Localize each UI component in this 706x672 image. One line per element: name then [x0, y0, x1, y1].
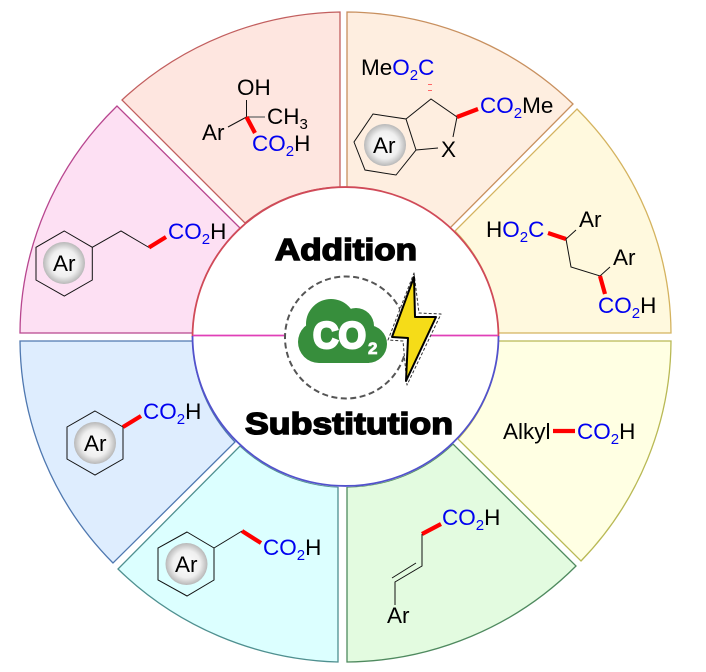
- molecule: diaryl diacid: Ar: [579, 207, 602, 232]
- molecule: benzoic acid: [67, 399, 201, 475]
- molecule: alkyl carboxylic acid: Alkyl: [503, 419, 551, 444]
- molecule: alpha-hydroxy acid: OH: [237, 75, 271, 100]
- molecule: fused ring diester: X: [441, 137, 456, 162]
- molecule: benzoic acid: 2: [177, 411, 185, 428]
- molecule: alpha-hydroxy acid: CO: [252, 131, 286, 156]
- molecule: benzoic acid: CO: [143, 399, 177, 424]
- panel: addition, diaryl diacid (yellow): [455, 109, 671, 333]
- panel: addition, dihydrobenzofuran diester (orange): [347, 12, 573, 228]
- molecule: diaryl diacid: 2: [520, 229, 528, 246]
- icon: CO2 cloud: [298, 299, 387, 363]
- molecule: fused ring diester: 2: [410, 67, 418, 84]
- molecule: fused ring diester: Me: [522, 93, 553, 118]
- heading: Addition: Addition: [275, 232, 417, 267]
- panel: addition, alpha-hydroxy acid (salmon): [122, 12, 340, 223]
- molecule: arylacetic acid: CO: [263, 535, 297, 560]
- molecule: benzoic acid: H: [185, 399, 201, 424]
- molecule: alpha-hydroxy acid: 3: [300, 116, 308, 133]
- molecule: fused ring diester: [354, 55, 553, 175]
- molecule: fused ring diester: C: [418, 55, 434, 80]
- molecule: arylacetic acid: 2: [297, 547, 305, 564]
- molecule: diaryl diacid: [486, 207, 656, 322]
- molecule: benzoic acid: Ar: [84, 431, 107, 456]
- icon: CO2 cloud: CO: [313, 315, 366, 356]
- molecule: arylpropanoic acid: 2: [202, 231, 210, 248]
- molecule: alpha-hydroxy acid: Ar: [202, 120, 225, 145]
- molecule: arylpropanoic acid: Ar: [53, 251, 76, 276]
- molecule: diaryl diacid: C: [528, 217, 544, 242]
- molecule: alpha-hydroxy acid: H: [294, 131, 310, 156]
- molecule: fused ring diester: CO: [480, 93, 514, 118]
- molecule: styrylacetic acid: [387, 505, 500, 628]
- center hub: [192, 187, 498, 487]
- molecule: arylacetic acid: [158, 531, 321, 596]
- molecule: styrylacetic acid: CO: [442, 505, 476, 530]
- molecule: fused ring diester: 2: [514, 105, 522, 122]
- icon: CO2 cloud: 2: [368, 339, 377, 358]
- molecule: alkyl carboxylic acid: [503, 419, 635, 448]
- molecule: alpha-hydroxy acid: 2: [286, 143, 294, 160]
- molecule: diaryl diacid: CO: [598, 293, 632, 318]
- icon: lightning bolt: [388, 273, 441, 385]
- molecule: diaryl diacid: Ar: [613, 245, 636, 270]
- molecule: arylpropanoic acid: [36, 219, 226, 296]
- panel: substitution, benzyl acid (cyan): [118, 446, 338, 662]
- molecule: styrylacetic acid: 2: [476, 517, 484, 534]
- molecule: fused ring diester: MeO: [361, 55, 410, 80]
- molecule: arylpropanoic acid: CO: [168, 219, 202, 244]
- molecule: styrylacetic acid: H: [484, 505, 500, 530]
- molecule: alkyl carboxylic acid: CO: [577, 419, 611, 444]
- panel: addition, aryl propanoic acid (pink): [20, 106, 240, 333]
- molecule: alkyl carboxylic acid: H: [619, 419, 635, 444]
- heading: Substitution: Substitution: [245, 406, 453, 441]
- molecule: alpha-hydroxy acid: [202, 75, 310, 160]
- molecule: styrylacetic acid: Ar: [387, 603, 410, 628]
- molecule: alpha-hydroxy acid: CH: [267, 104, 300, 129]
- dashed circle: [285, 276, 407, 398]
- panel: substitution, aryl acid (blue): [20, 341, 235, 563]
- molecule: alkyl carboxylic acid: 2: [611, 431, 619, 448]
- molecule: arylacetic acid: H: [305, 535, 321, 560]
- molecule: arylacetic acid: Ar: [175, 552, 198, 577]
- panel: substitution, allyl acid (green): [347, 444, 576, 662]
- molecule: arylpropanoic acid: H: [210, 219, 226, 244]
- molecule: diaryl diacid: H: [640, 293, 656, 318]
- molecule: fused ring diester: Ar: [373, 133, 396, 158]
- panel: substitution, alkyl acid (pale yellow): [458, 341, 671, 561]
- molecule: diaryl diacid: 2: [632, 305, 640, 322]
- molecule: diaryl diacid: HO: [486, 217, 520, 242]
